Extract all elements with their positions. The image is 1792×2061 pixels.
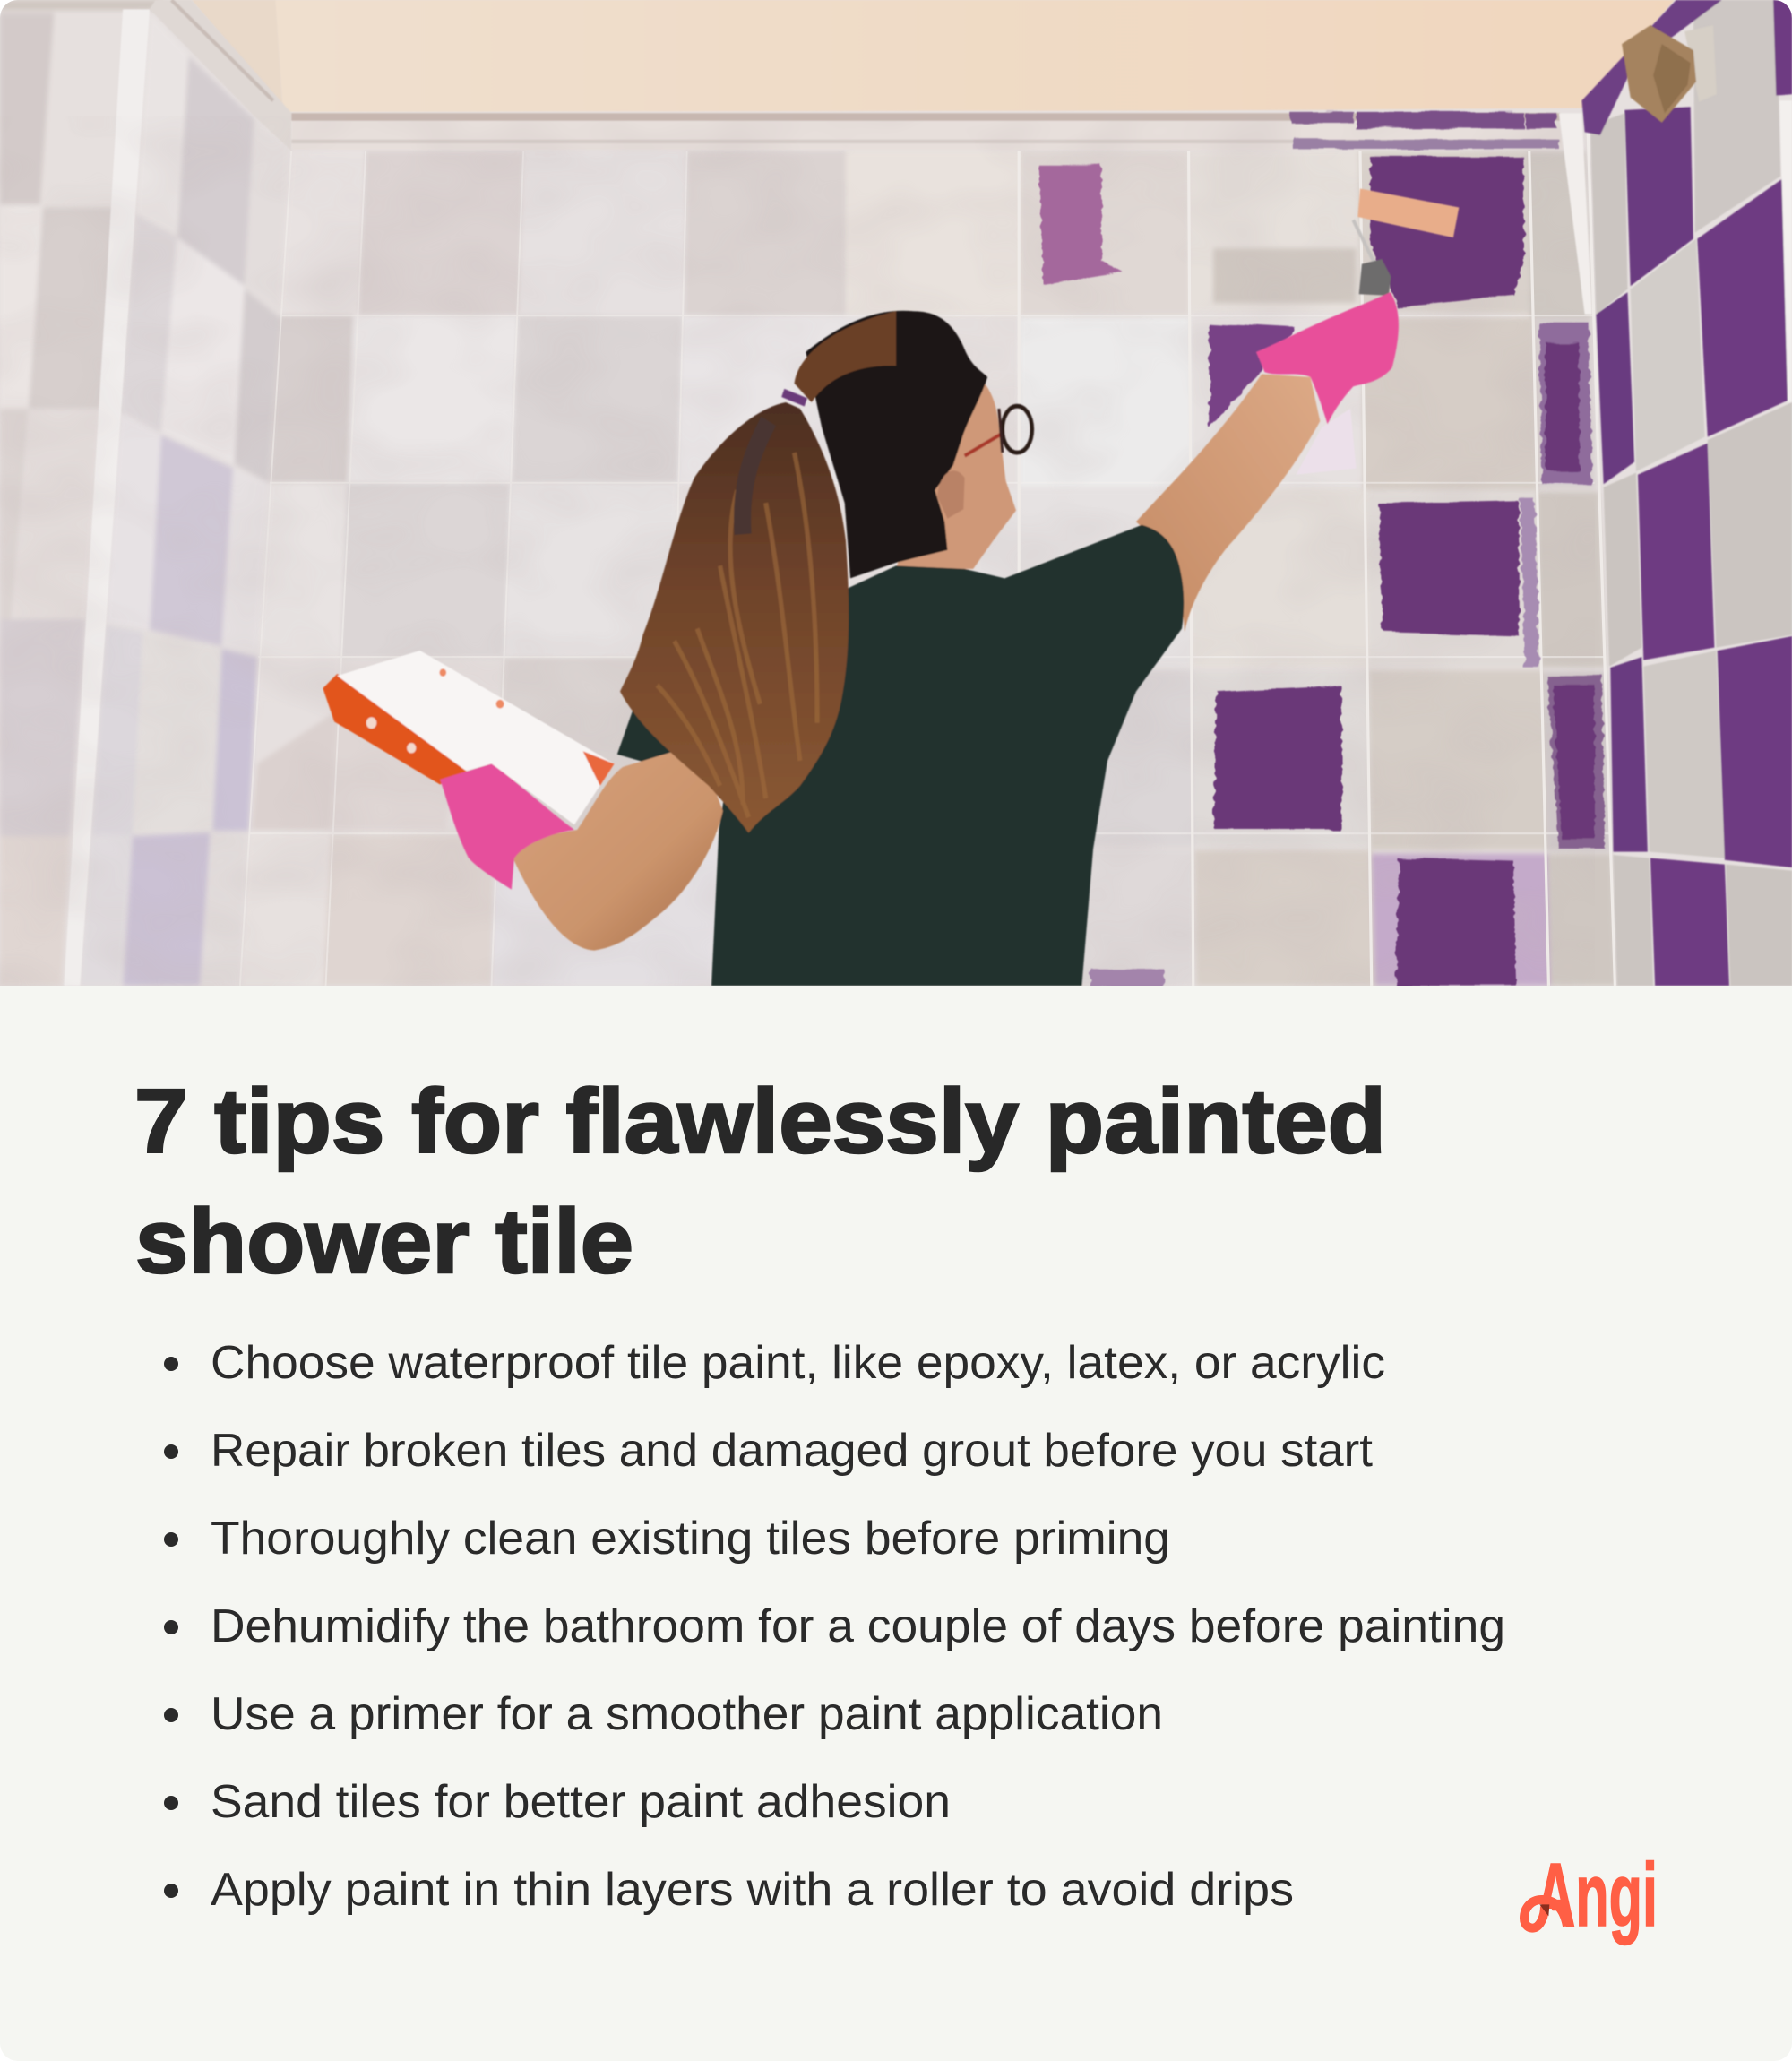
wall tiles, all soft edged: [0, 0, 1616, 986]
tip 2: Repair broken tiles and damaged grout before you start: [211, 1425, 1374, 1477]
tip 1: Choose waterproof tile paint, like epoxy, latex, or acrylic: [211, 1337, 1385, 1389]
woman: [323, 188, 1459, 986]
logo: Angi: Angi: [1536, 1845, 1658, 1945]
glasses: [965, 406, 1032, 456]
ear: [937, 470, 965, 519]
tip 5: Use a primer for a smoother paint application: [211, 1688, 1163, 1740]
tip 4: Dehumidify the bathroom for a couple of days before painting: [211, 1600, 1505, 1652]
left wall corner pillar: [64, 10, 150, 986]
logo: Angi: [1523, 1845, 1658, 1945]
photo: woman painting shower tile purple: [0, 0, 1792, 986]
dark hair on head: [806, 311, 987, 578]
tip 3: Thoroughly clean existing tiles before priming: [211, 1513, 1170, 1565]
purple painted tiles, back wall: [1039, 112, 1605, 986]
shirt: [617, 525, 1184, 986]
ceiling: [274, 0, 1675, 112]
title: [134, 1072, 1386, 1292]
ponytail: [620, 311, 896, 832]
ceiling left wedge: [192, 0, 283, 110]
title: shower tile: [135, 1192, 633, 1292]
back wall crown moulding: [290, 113, 1561, 143]
left crown moulding: [150, 0, 291, 151]
tip 7: Apply paint in thin layers with a roller to avoid drips: [211, 1864, 1294, 1916]
glare on wet tile: [1297, 409, 1356, 475]
grout lines right: [1019, 119, 1615, 986]
tray: [323, 651, 615, 824]
right glove: [1256, 292, 1399, 425]
icon: masking tape and brown paper: [1622, 25, 1717, 123]
raised arm: [1136, 374, 1320, 632]
title: 7 tips for flawlessly painted: [134, 1072, 1386, 1172]
left arm: [512, 751, 723, 951]
tip 6: Sand tiles for better paint adhesion: [211, 1776, 951, 1828]
grout lines: [240, 151, 1612, 986]
paint roller: [1353, 188, 1459, 296]
neck and face: [896, 371, 1016, 569]
right wall checker tiles: [1559, 0, 1792, 986]
bulleted tips list: [164, 1337, 1505, 1916]
left glove: [440, 763, 574, 890]
wall mottling: [0, 116, 1595, 986]
back wall row 1: [280, 151, 366, 315]
